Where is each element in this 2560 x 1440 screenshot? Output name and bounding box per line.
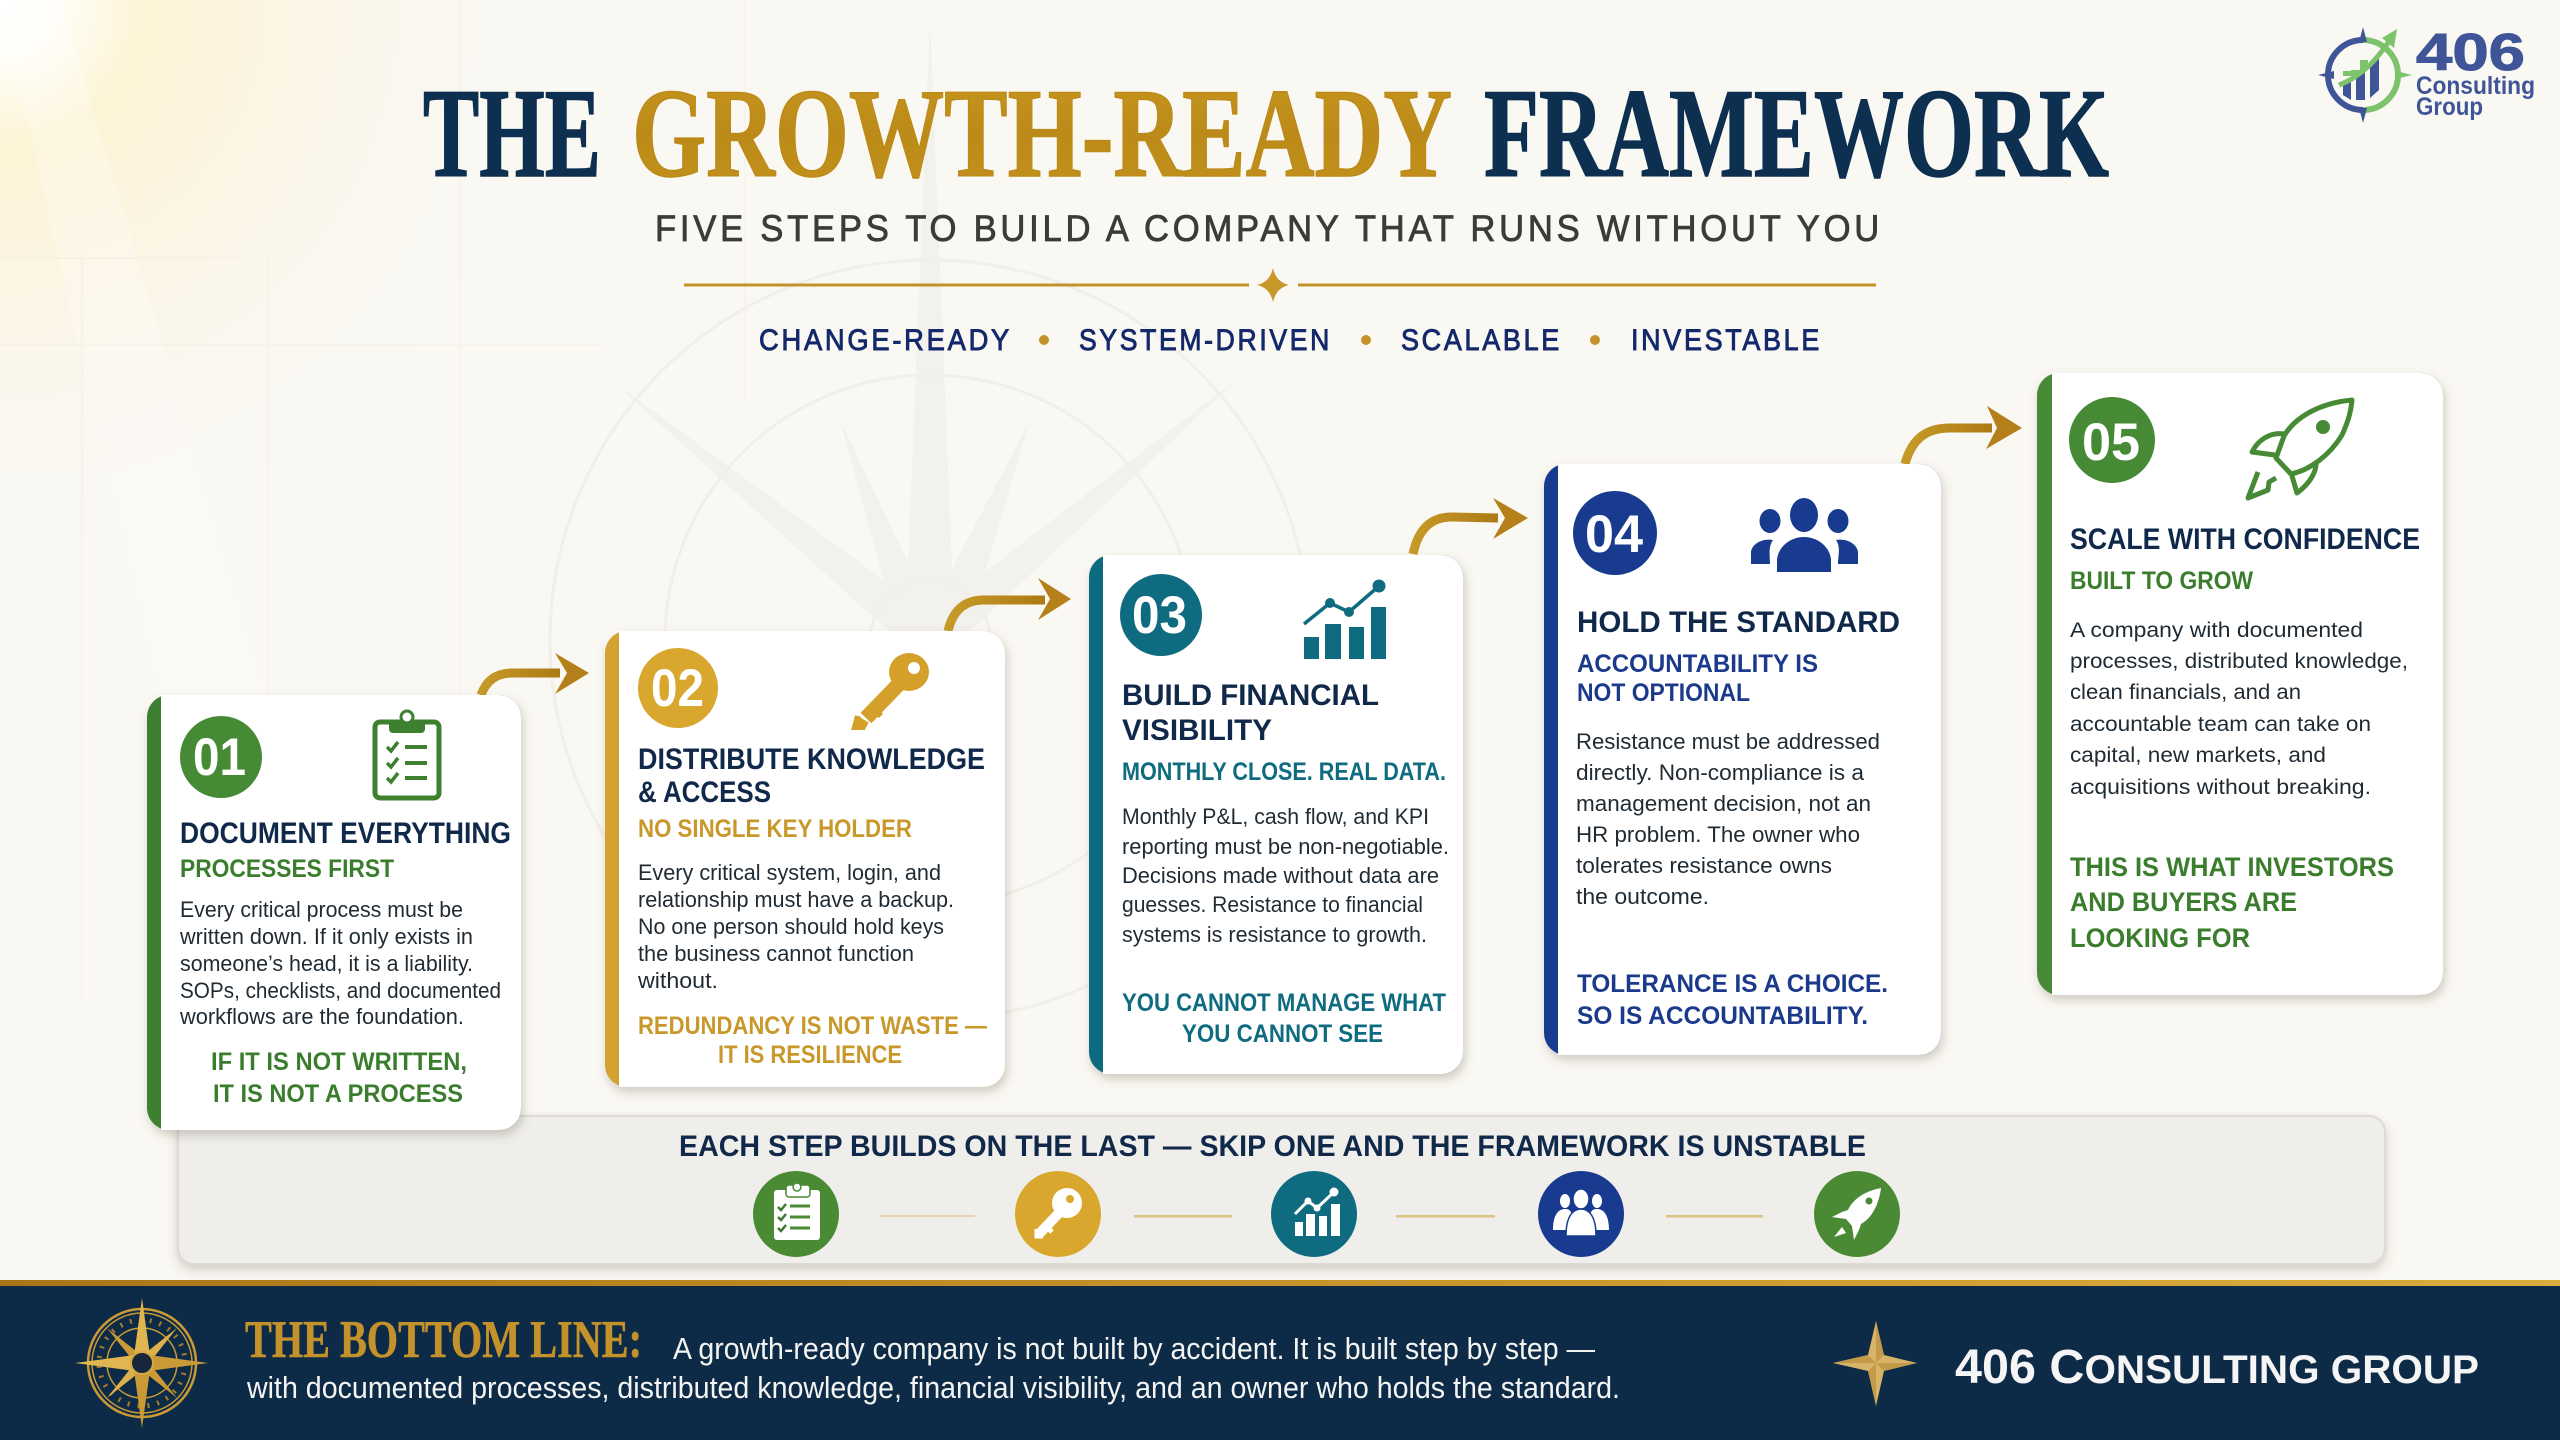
title (423, 64, 2109, 204)
card 1 callout: IF IT IS NOT WRITTEN, (211, 1048, 467, 1076)
card 3 callout: YOU CANNOT SEE (1182, 1020, 1383, 1048)
icon: chart (1304, 580, 1386, 659)
title: GROWTH-READY (632, 64, 1452, 204)
card 3 body: reporting must be non-negotiable. (1122, 834, 1449, 859)
footer band (0, 1280, 2560, 1440)
badge 04: 04 (1585, 505, 1644, 564)
arrow 3 to 4 (1413, 498, 1528, 554)
card 4 callout: TOLERANCE IS A CHOICE. (1577, 970, 1888, 998)
logo: 406 Consulting Group: 406 (2416, 24, 2525, 82)
icon: people (1751, 498, 1858, 572)
card 1 callout: IT IS NOT A PROCESS (213, 1080, 463, 1108)
card 1 body: written down. If it only exists in (179, 924, 473, 949)
card 2 body: Every critical system, login, and (638, 860, 941, 885)
card 5 callout: LOOKING FOR (2070, 923, 2250, 953)
card 4 body: tolerates resistance owns (1576, 853, 1832, 878)
card 4 callout (1577, 970, 1888, 1030)
card 4 heading: HOLD THE STANDARD (1577, 606, 1900, 639)
badge 03: 03 (1132, 586, 1187, 645)
card 1: document everything (147, 695, 521, 1130)
card 2 heading (638, 743, 985, 809)
card 3 subheading: MONTHLY CLOSE. REAL DATA. (1122, 758, 1446, 786)
card 3 body: Decisions made without data are (1122, 863, 1439, 888)
card 2 body: No one person should hold keys (638, 914, 944, 939)
badge 05: 05 (2082, 413, 2140, 472)
card 3 heading: VISIBILITY (1122, 714, 1272, 747)
card 1 body: Every critical process must be (180, 897, 463, 922)
card 4: hold the standard (1544, 464, 1941, 1055)
card 1 body: SOPs, checklists, and documented (180, 978, 501, 1003)
card 4 body (1576, 729, 1880, 909)
card 2 callout: REDUNDANCY IS NOT WASTE — (638, 1012, 987, 1040)
mini icon: chart (1271, 1171, 1357, 1257)
card 2 body: the business cannot function (638, 941, 914, 966)
arrow 4 to 5 (1905, 406, 2022, 464)
card 3 body (1122, 804, 1449, 947)
card 4 callout: SO IS ACCOUNTABILITY. (1577, 1002, 1868, 1030)
card 2 body: relationship must have a backup. (638, 887, 954, 912)
strip heading: EACH STEP BUILDS ON THE LAST — SKIP ONE AND THE FRAMEWORK IS UNSTABLE (679, 1130, 1866, 1163)
bottom line text (246, 1331, 1620, 1405)
icon: rocket (2248, 400, 2352, 498)
card 5 callout (2070, 852, 2394, 953)
icon: gold star (1833, 1321, 1917, 1406)
badge 01: 01 (193, 728, 246, 787)
badge 01 (180, 716, 262, 798)
card 4 subheading: ACCOUNTABILITY IS (1577, 650, 1818, 678)
card 3 callout (1122, 989, 1446, 1048)
card 5 subheading: BUILT TO GROW (2070, 567, 2253, 595)
card 2 body: without. (637, 968, 718, 993)
card 4 subheading: NOT OPTIONAL (1577, 679, 1750, 707)
card 3 heading: BUILD FINANCIAL (1122, 679, 1379, 712)
icon: gold compass (75, 1298, 208, 1428)
logo: 406 Consulting Group (2318, 24, 2535, 123)
card 3 callout: YOU CANNOT MANAGE WHAT (1122, 989, 1446, 1017)
card 5 callout: THIS IS WHAT INVESTORS (2070, 852, 2394, 882)
tagline: SCALABLE (1401, 324, 1562, 357)
card 5 body: acquisitions without breaking. (2070, 776, 2371, 799)
bottom strip: framework sequence (178, 1116, 2385, 1264)
bottom line text: with documented processes, distributed knowledge, financial visibility, and an owner who holds the standard. (246, 1370, 1620, 1405)
arrow 1 to 2 (481, 653, 589, 695)
badge 04 (1573, 491, 1657, 575)
logo: 406 Consulting Group: Group (2416, 93, 2483, 121)
card 5 callout: AND BUYERS ARE (2070, 887, 2297, 917)
bottom line heading: THE BOTTOM LINE: (245, 1311, 642, 1369)
card 5 body: capital, new markets, and (2070, 744, 2326, 767)
arrow 2 to 3 (948, 578, 1071, 631)
card 5 body: processes, distributed knowledge, (2070, 650, 2408, 673)
icon: clipboard (375, 711, 439, 798)
card 1 body: workflows are the foundation. (179, 1004, 464, 1029)
mini icon: key (1015, 1171, 1101, 1257)
card 4 body: Resistance must be addressed (1576, 729, 1880, 754)
tagline (759, 324, 1822, 357)
title: FRAMEWORK (1484, 64, 2109, 204)
card 5 heading: SCALE WITH CONFIDENCE (2070, 523, 2420, 556)
card 2 callout: IT IS RESILIENCE (718, 1041, 902, 1069)
card 2 heading: DISTRIBUTE KNOWLEDGE (638, 743, 985, 776)
divider with star (684, 268, 1876, 302)
tagline: INVESTABLE (1631, 324, 1822, 357)
title: THE (423, 64, 601, 204)
card 3: build financial visibility (1089, 555, 1463, 1074)
card 3 body: systems is resistance to growth. (1122, 922, 1427, 947)
card 4 body: management decision, not an (1576, 791, 1871, 816)
subtitle: FIVE STEPS TO BUILD A COMPANY THAT RUNS WITHOUT YOU (655, 208, 1883, 249)
logo: 406 Consulting Group: Consulting (2416, 72, 2535, 100)
card 1 callout (211, 1048, 467, 1108)
badge 02: 02 (651, 659, 704, 718)
company name: 406 CONSULTING GROUP (1955, 1341, 2479, 1394)
mini icon: rocket (1814, 1171, 1900, 1257)
card 1 body (179, 897, 501, 1029)
card 3 heading (1122, 679, 1379, 747)
card 3 body: Monthly P&L, cash flow, and KPI (1122, 804, 1429, 829)
connectors (880, 1215, 1763, 1218)
badge 02 (638, 648, 718, 728)
tagline: SYSTEM-DRIVEN (1079, 324, 1332, 357)
card 4 body: HR problem. The owner who (1576, 822, 1860, 847)
card 5: scale with confidence (2037, 373, 2443, 995)
card 4 body: the outcome. (1576, 884, 1709, 909)
card 5 body: A company with documented (2070, 619, 2363, 642)
mini icon: clipboard (753, 1171, 839, 1257)
tagline: CHANGE-READY (759, 324, 1012, 357)
card 2 subheading: NO SINGLE KEY HOLDER (638, 815, 912, 843)
card 4 body: directly. Non-compliance is a (1576, 760, 1865, 785)
card 4 subheading (1577, 650, 1818, 707)
card 1 body: someone’s head, it is a liability. (180, 951, 473, 976)
card 1 subheading: PROCESSES FIRST (180, 855, 394, 883)
card 5 body: accountable team can take on (2070, 713, 2371, 736)
bottom line text: A growth-ready company is not built by accident. It is built step by step — (673, 1331, 1595, 1366)
icon: key (855, 653, 929, 727)
card 2 heading: & ACCESS (638, 776, 771, 809)
card 2 callout (638, 1012, 987, 1069)
card 3 body: guesses. Resistance to financial (1122, 892, 1423, 917)
card 1 heading: DOCUMENT EVERYTHING (180, 817, 511, 850)
card 5 body: clean financials, and an (2070, 681, 2301, 704)
badge 05 (2069, 397, 2155, 483)
card 2: distribute knowledge and access (605, 631, 1005, 1087)
card 5 body (2070, 619, 2408, 799)
card 2 body (637, 860, 954, 993)
watermark compass (550, 20, 1310, 1020)
mini icon: people (1538, 1171, 1624, 1257)
badge 03 (1120, 574, 1202, 656)
